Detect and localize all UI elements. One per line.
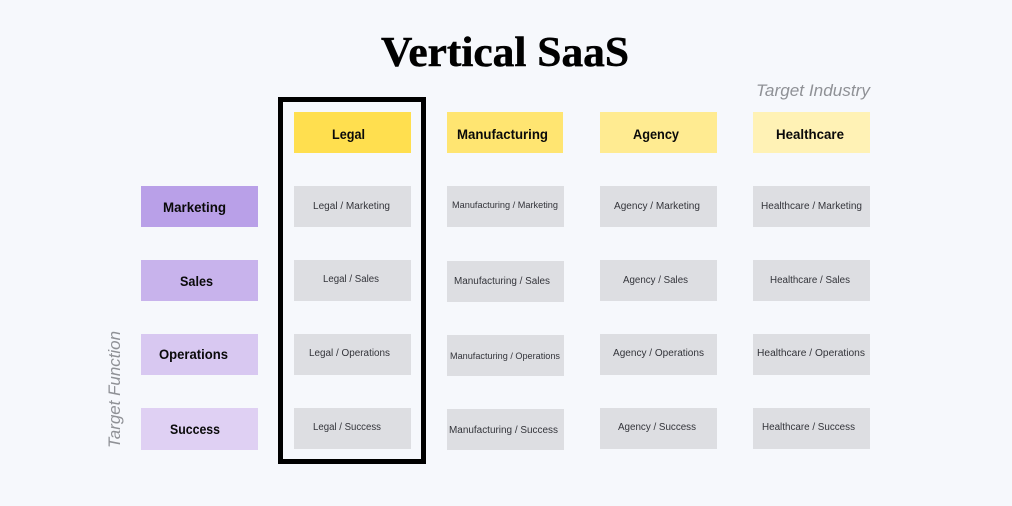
cell: agency operations: Agency / Operations [613, 348, 704, 359]
cell: healthcare marketing: Healthcare / Marketing [761, 201, 862, 212]
row header: operations [141, 334, 258, 375]
cell: manufacturing marketing [447, 186, 564, 227]
row header: success: Success [170, 421, 220, 437]
column header: manufacturing: Manufacturing [457, 126, 548, 142]
cell: healthcare marketing [753, 186, 870, 227]
cell: legal operations [294, 334, 411, 375]
row header: sales [141, 260, 258, 301]
cell: agency success [600, 408, 717, 449]
cell: manufacturing operations [447, 335, 564, 376]
cell: legal marketing: Legal / Marketing [313, 201, 390, 212]
column header: agency: Agency [633, 126, 679, 142]
cell: agency success: Agency / Success [618, 422, 696, 433]
cell: manufacturing sales [447, 261, 564, 302]
column header: legal [294, 112, 411, 153]
axis label: target function: Target Function [105, 331, 124, 448]
column header: legal: Legal [332, 126, 365, 142]
cell: manufacturing marketing: Manufacturing / Marketing [452, 200, 558, 211]
row header: operations: Operations [159, 346, 228, 362]
cell: healthcare operations [753, 334, 870, 375]
column header: healthcare [753, 112, 870, 153]
cell: healthcare success [753, 408, 870, 449]
row header: marketing: Marketing [163, 199, 226, 215]
cell: healthcare operations: Healthcare / Operations [757, 348, 865, 359]
cell: legal sales [294, 260, 411, 301]
cell: agency marketing [600, 186, 717, 227]
highlight frame: legal column [280, 100, 424, 462]
title: Vertical SaaS [381, 30, 629, 76]
column header: healthcare: Healthcare [776, 126, 844, 142]
cell: agency sales: Agency / Sales [623, 275, 688, 286]
cell: legal sales: Legal / Sales [323, 274, 379, 285]
row header: success [141, 408, 258, 450]
column header: manufacturing [447, 112, 563, 153]
column header: agency [600, 112, 717, 153]
cell: agency operations [600, 334, 717, 375]
cell: agency sales [600, 260, 717, 301]
cell: agency marketing: Agency / Marketing [614, 201, 700, 212]
cell: manufacturing sales: Manufacturing / Sales [454, 276, 550, 287]
cell: healthcare success: Healthcare / Success [762, 422, 855, 433]
row header: sales: Sales [180, 273, 213, 289]
cell: healthcare sales: Healthcare / Sales [770, 275, 850, 286]
cell: legal success: Legal / Success [313, 422, 381, 433]
cell: legal success [294, 408, 411, 449]
cell: manufacturing success [447, 409, 564, 450]
row header: marketing [141, 186, 258, 227]
cell: legal marketing [294, 186, 411, 227]
cell: manufacturing operations: Manufacturing / Operations [450, 351, 560, 362]
cell: healthcare sales [753, 260, 870, 301]
cell: manufacturing success: Manufacturing / Success [449, 425, 558, 436]
axis label: target industry: Target Industry [756, 81, 872, 100]
cell: legal operations: Legal / Operations [309, 348, 390, 359]
